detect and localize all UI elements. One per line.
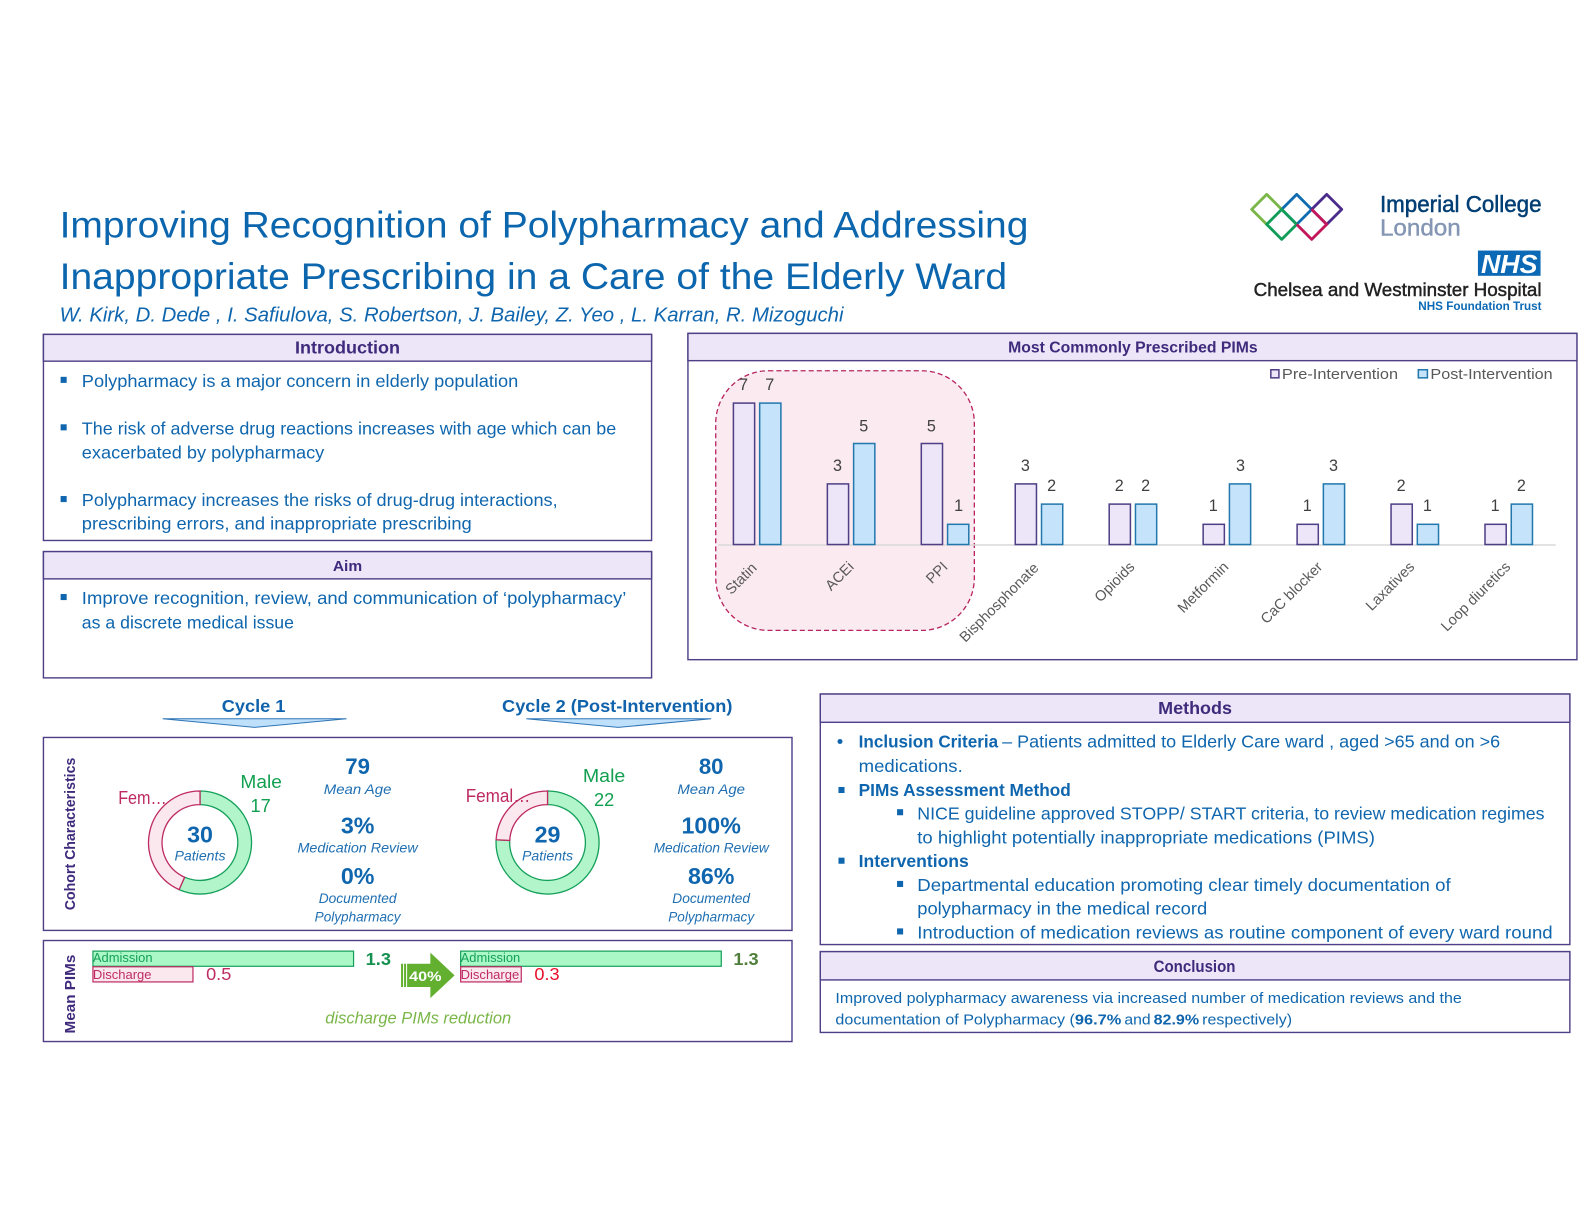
- logo: Imperial College London: Imperial College: [1380, 191, 1542, 217]
- bars: cycle 1: 0.5: [206, 964, 231, 984]
- bar chart: 3: [1329, 457, 1338, 475]
- panel: methods: medications.: [859, 756, 963, 776]
- bar chart: 2: [1517, 477, 1526, 495]
- logo: NHS Chelsea and Westminster: NHS Foundation Trust: [1418, 300, 1542, 313]
- bars: cycle 2: Admission: [461, 951, 520, 965]
- heading: cycle 1: Cycle 1: [222, 696, 286, 716]
- bar chart: 2: [1397, 477, 1406, 495]
- arrow: 40% reduction: 40%: [409, 968, 442, 984]
- panel: conclusion: documentation of Polypharmacy (: [835, 1011, 1075, 1028]
- bar chart: 3: [1021, 457, 1030, 475]
- bar chart: Loop diuretics: [1438, 559, 1514, 635]
- stats: cycle 1: 0%: [341, 863, 375, 889]
- logo: NHS Chelsea and Westminster: Chelsea and Westminster Hospital: [1254, 280, 1542, 300]
- panel: introduction: prescribing errors, and inappropriate prescribing: [82, 513, 472, 533]
- donut: cycle 2: 29: [535, 822, 561, 848]
- bar chart: 1: [1423, 497, 1432, 515]
- panel: conclusion: 82.9%: [1154, 1011, 1200, 1028]
- panel: conclusion: and: [1124, 1011, 1151, 1028]
- heading: cycle 2: [502, 696, 732, 727]
- bar chart: [718, 376, 1556, 646]
- donut: cycle 2: Patients: [522, 848, 573, 864]
- bars: cycle 2: [461, 949, 759, 984]
- panel: introduction: The risk of adverse drug reactions increases with age which can be: [82, 418, 616, 438]
- heading: cycle 2: Cycle 2 (Post-Intervention): [502, 696, 732, 716]
- stats: cycle 2: 100%: [681, 812, 741, 838]
- arrow: 40% reduction: [401, 953, 455, 998]
- stats: cycle 1: [298, 754, 419, 924]
- heading: aim: Aim: [333, 558, 362, 575]
- donut: cycle 1: Fem…: [118, 788, 167, 808]
- bar chart: CaC blocker: [1258, 559, 1326, 627]
- title: [60, 203, 1028, 297]
- panel: aim: [43, 552, 652, 678]
- heading: chart: Most Commonly Prescribed PIMs: [1008, 340, 1258, 357]
- bar chart: 1: [954, 497, 963, 515]
- panel: methods: to highlight potentially inappropriate medications (PIMS): [917, 828, 1375, 848]
- logo: NHS Chelsea and Westminster: [1254, 249, 1542, 313]
- panel: conclusion: [820, 952, 1570, 1032]
- bar chart: 1: [1491, 497, 1500, 515]
- panel: introduction: Polypharmacy is a major concern in elderly population: [82, 371, 518, 391]
- panel: most commonly prescribed PIMs: [688, 333, 1577, 660]
- bar chart: 2: [1115, 477, 1124, 495]
- panel: introduction: exacerbated by polypharmacy: [82, 443, 325, 463]
- highlight: top three: [716, 371, 974, 630]
- panel: conclusion: Improved polypharmacy awareness via increased number of medication reviews and the: [835, 990, 1462, 1007]
- heading: cohort characteristics: Cohort Characteristics: [62, 758, 79, 910]
- panel: conclusion: 96.7%: [1075, 1011, 1122, 1028]
- panel: methods: Inclusion Criteria: [859, 732, 999, 752]
- icon: Imperial diamonds: [1252, 194, 1342, 239]
- panel: aim: Improve recognition, review, and communication of ‘polypharmacy’: [82, 588, 626, 608]
- panel: methods: [820, 694, 1570, 945]
- logo: Imperial College London: [1252, 191, 1542, 240]
- donut: cycle 1: [118, 772, 282, 894]
- bar chart: Opioids: [1092, 559, 1138, 606]
- bar chart: 2: [1047, 477, 1056, 495]
- donut: cycle 2: 22: [594, 790, 614, 810]
- bars: cycle 1: Admission: [93, 951, 153, 965]
- donut: cycle 1: Patients: [174, 848, 226, 864]
- panel: aim: as a discrete medical issue: [82, 612, 294, 632]
- bars: cycle 1: Discharge: [93, 968, 152, 982]
- stats: cycle 2: 86%: [688, 863, 735, 889]
- stats: cycle 1: 3%: [341, 812, 375, 838]
- bar chart: 7: [739, 376, 748, 394]
- panel: conclusion: respectively): [1202, 1011, 1292, 1028]
- panel: methods: PIMs Assessment Method: [859, 780, 1071, 800]
- stats: cycle 2: 80: [699, 754, 724, 779]
- panel: methods: NICE guideline approved STOPP/ START criteria, to review medication regimes: [917, 803, 1545, 823]
- bars: cycle 2: Discharge: [461, 968, 519, 982]
- bar chart: 5: [927, 417, 936, 435]
- bar chart: 5: [859, 417, 868, 435]
- caption: discharge PIMs reduction: discharge PIMs reduction: [325, 1009, 511, 1027]
- bar chart: PPI: [923, 559, 951, 587]
- bar chart: 2: [1141, 477, 1150, 495]
- stats: cycle 1: Medication Review: [298, 840, 419, 856]
- heading: introduction: Introduction: [295, 338, 400, 358]
- legend: [1271, 366, 1553, 383]
- bar chart: ACEi: [823, 559, 857, 594]
- logo: Imperial College London: London: [1380, 214, 1461, 240]
- stats: cycle 1: 79: [345, 754, 370, 779]
- bar chart: Laxatives: [1363, 559, 1418, 614]
- bar chart: 3: [833, 457, 842, 475]
- panel: methods: polypharmacy in the medical record: [917, 898, 1207, 918]
- donut: cycle 2: Male: [583, 766, 625, 786]
- donut: cycle 1: 17: [251, 796, 271, 816]
- bar chart: Statin: [723, 560, 760, 598]
- stats: cycle 2: Mean Age: [677, 781, 745, 797]
- panel: mean PIMs: [43, 941, 792, 1042]
- panel: methods: Interventions: [859, 851, 969, 871]
- title: Inappropriate Prescribing in a Care of the Elderly Ward: [60, 255, 1007, 297]
- panel: methods: Departmental education promoting clear timely documentation of: [917, 875, 1451, 895]
- stats: cycle 1: Polypharmacy: [315, 908, 401, 924]
- logo: NHS Chelsea and Westminster: NHS: [1481, 249, 1538, 279]
- donut: cycle 1: Male: [240, 772, 282, 792]
- bars: cycle 1: 1.3: [366, 949, 391, 969]
- stats: cycle 2: Polypharmacy: [668, 908, 755, 924]
- bar chart: 1: [1209, 497, 1218, 515]
- donut: cycle 1: 30: [187, 822, 213, 848]
- panel: methods: – Patients admitted to Elderly Care ward , aged >65 and on >6: [1002, 732, 1500, 752]
- legend: Post-Intervention: [1430, 366, 1553, 383]
- panel: methods: Introduction of medication reviews as routine component of every ward round: [917, 922, 1553, 942]
- panel: introduction: Polypharmacy increases the risks of drug-drug interactions,: [82, 490, 558, 510]
- stats: cycle 2: [654, 754, 770, 924]
- donut: cycle 2: [466, 766, 625, 894]
- stats: cycle 2: Medication Review: [654, 840, 770, 856]
- heading: conclusion: Conclusion: [1154, 958, 1235, 976]
- stats: cycle 2: Documented: [672, 890, 751, 906]
- heading: cycle 1: [163, 696, 346, 727]
- panel: introduction: [43, 334, 652, 540]
- bar chart: Bisphosphonate: [957, 560, 1042, 646]
- donut: cycle 2: Femal…: [466, 786, 530, 806]
- bar chart: Metformin: [1175, 559, 1232, 617]
- legend: Pre-Intervention: [1282, 366, 1398, 383]
- heading: mean PIMs: Mean PIMs: [62, 955, 79, 1033]
- stats: cycle 1: Documented: [319, 890, 398, 906]
- bars: cycle 2: 0.3: [534, 964, 560, 984]
- panel: cohort characteristics: [43, 737, 792, 930]
- stats: cycle 1: Mean Age: [324, 781, 392, 797]
- title: Improving Recognition of Polypharmacy and Addressing: [60, 203, 1028, 245]
- authors: W. Kirk, D. Dede , I. Safiulova, S. Robertson, J. Bailey, Z. Yeo , L. Karran, R. Mizoguchi: [60, 304, 844, 326]
- bar chart: 3: [1236, 457, 1245, 475]
- bar chart: 7: [765, 376, 774, 394]
- heading: methods: Methods: [1158, 698, 1232, 718]
- bar chart: 1: [1303, 497, 1312, 515]
- bars: cycle 2: 1.3: [733, 949, 759, 969]
- bars: cycle 1: [93, 949, 391, 984]
